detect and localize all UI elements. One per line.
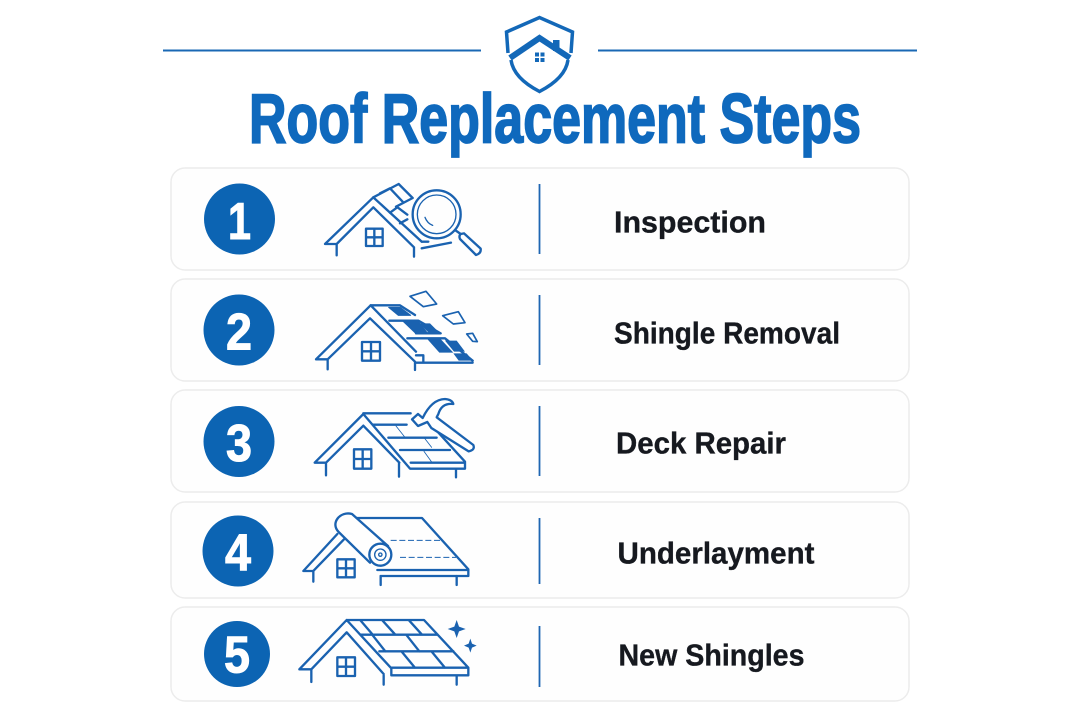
number badge 5: 5 [224, 626, 250, 684]
number badge 2 [204, 294, 274, 366]
number badge 1: 1 [228, 193, 251, 251]
icon: house with new shingles and sparkles [299, 620, 477, 685]
number badge 3: 3 [226, 415, 252, 473]
label: Deck Repair [616, 426, 786, 460]
label: Inspection [614, 204, 766, 240]
icon: house roof with magnifier [325, 184, 481, 257]
divider [538, 295, 540, 365]
divider [538, 626, 540, 687]
icon: house with underlayment roll [303, 513, 468, 585]
panel: step 5 new shingles [171, 607, 909, 701]
number badge 3 [204, 406, 274, 477]
panel: step 2 shingle removal [171, 279, 909, 381]
label: New Shingles [618, 638, 804, 672]
number badge 2: 2 [226, 304, 252, 362]
number badge 5 [204, 621, 270, 687]
number badge 1 [204, 184, 275, 254]
number badge 4 [202, 516, 274, 586]
icon: house with hammer [315, 399, 474, 477]
header rule right [598, 50, 917, 52]
header rule left [163, 50, 481, 52]
divider [538, 406, 540, 476]
panel: step 1 inspection [171, 168, 909, 270]
divider [538, 184, 540, 254]
title: Roof Replacement Steps [249, 80, 861, 158]
label: Underlayment [618, 536, 814, 570]
panel: step 3 deck repair [171, 390, 909, 492]
panel: step 4 underlayment [171, 502, 909, 598]
divider [538, 518, 540, 584]
icon: shield with house [506, 18, 572, 92]
label: Shingle Removal [614, 316, 840, 350]
icon: house with shingles coming off [316, 291, 477, 370]
number badge 4: 4 [225, 524, 251, 582]
